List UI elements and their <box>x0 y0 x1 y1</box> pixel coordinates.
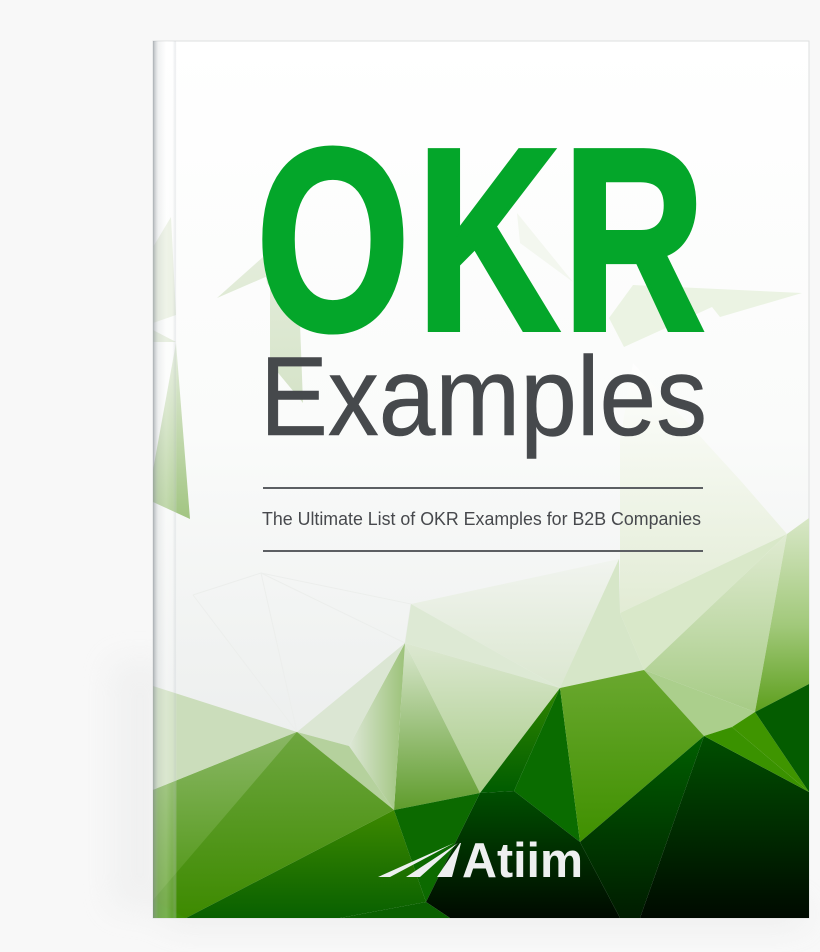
rule: bottom <box>263 550 703 552</box>
logo: Atiim <box>378 834 583 888</box>
icon: road stripes <box>378 843 461 877</box>
subtitle: Examples: Examples <box>260 334 707 459</box>
book cover <box>153 41 809 918</box>
tagline: The Ultimate List of OKR Examples for B2B Companies <box>262 508 701 529</box>
polygon artwork: pale upper shapes <box>153 213 802 613</box>
faint facet lines <box>193 573 411 732</box>
title: OKR: OKR <box>256 94 705 385</box>
logo wordmark: Atiim <box>462 834 583 888</box>
cover base <box>153 41 809 918</box>
spine highlight <box>153 41 177 918</box>
polygon artwork: deep green facets <box>153 670 809 918</box>
book shadow <box>110 660 805 926</box>
rule: top <box>263 487 703 489</box>
polygon artwork: light facets <box>153 518 809 810</box>
